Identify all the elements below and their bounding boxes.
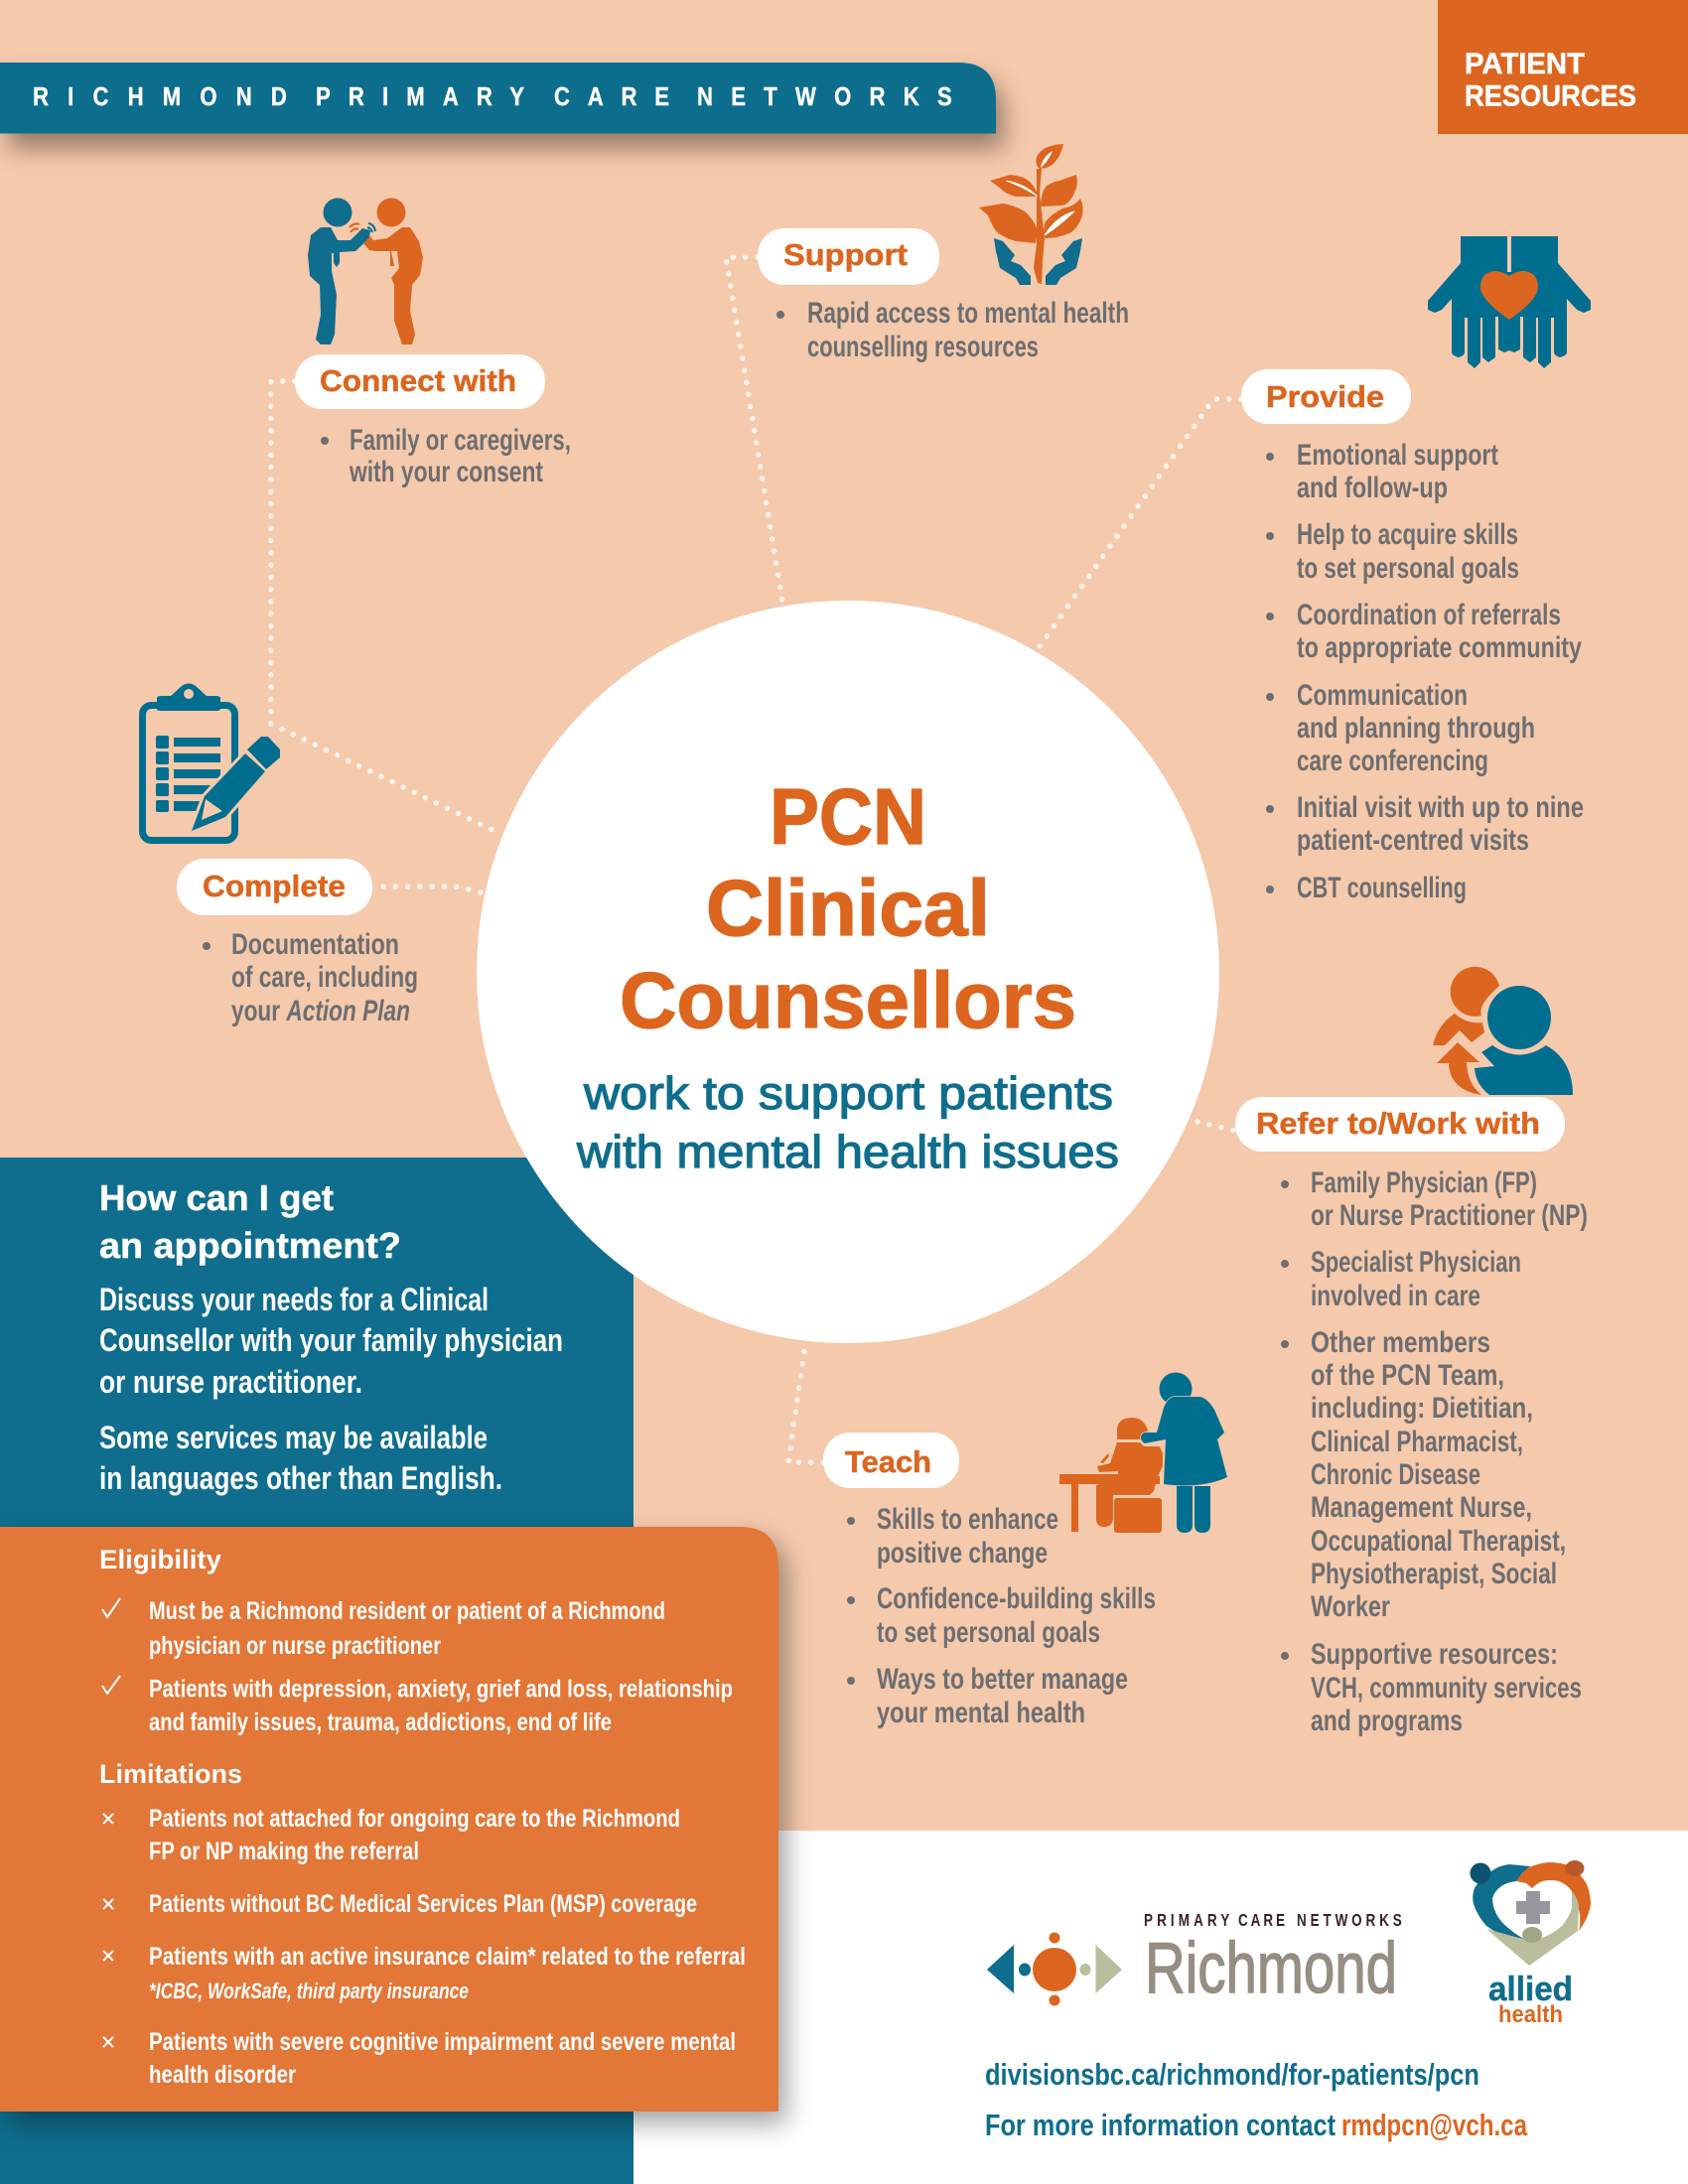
list: provide: care conferencing [1297, 745, 1488, 777]
appointment text: Discuss your needs for a Clinical [99, 1282, 489, 1317]
icon: plant in hands [979, 144, 1083, 285]
heading: eligibility: Eligibility [99, 1545, 221, 1574]
appointment text: or nurse practitioner. [99, 1364, 362, 1400]
panel: eligibility and limitations [0, 1527, 778, 2112]
appointment text: an appointment? [99, 1225, 401, 1266]
patient resources tag: RESOURCES [1465, 79, 1636, 113]
list: refer to / work with: Management Nurse, [1311, 1491, 1532, 1524]
patient resources tag: PATIENT [1465, 48, 1585, 80]
header banner: CARE [554, 82, 669, 111]
list: teach: your mental health [877, 1697, 1085, 1729]
patient resources tag [1438, 0, 1688, 134]
title [620, 772, 1076, 1044]
logo: primary care networks richmond: NETWORKS [1297, 1911, 1402, 1931]
list: refer to / work with: and programs [1311, 1705, 1463, 1737]
list: refer to / work with: including: Dietitian, [1311, 1392, 1533, 1425]
list: teach: Skills to enhance [877, 1503, 1058, 1536]
dotted connector: refer [1197, 1122, 1235, 1131]
icon: referral people [1433, 967, 1573, 1095]
list: refer to / work with: Clinical Pharmacist, [1311, 1426, 1523, 1458]
pill: connect with [295, 354, 545, 409]
list: provide: Emotional support [1297, 439, 1498, 472]
appointment text [99, 1177, 563, 1496]
logo: allied health [1470, 1860, 1591, 2028]
eligibility items: Patients with depression, anxiety, grief and loss, relationship [149, 1676, 733, 1704]
limitation items: Patients with an active insurance claim* related to the referral [149, 1943, 746, 1971]
list: provide: Help to acquire skills [1297, 518, 1518, 551]
title: Counsellors [620, 956, 1076, 1044]
dotted connector: connect with [271, 381, 494, 831]
list: refer to / work with: or Nurse Practitioner (NP) [1311, 1199, 1588, 1232]
icon: counsellor and student [1059, 1372, 1227, 1533]
pill: teach: Teach [845, 1444, 931, 1479]
list: refer to / work with [1281, 1166, 1588, 1737]
limitation items: FP or NP making the referral [149, 1838, 419, 1865]
logo: primary care networks richmond [987, 1911, 1402, 2008]
list: connect with [321, 424, 571, 488]
limitation items: health disorder [149, 2061, 296, 2089]
list: provide [1266, 439, 1584, 904]
pill: provide [1241, 369, 1411, 424]
pill: complete [177, 859, 372, 915]
list: support: Rapid access to mental health [807, 297, 1129, 330]
list: provide: to appropriate community [1297, 631, 1582, 664]
pill: complete: Complete [203, 869, 346, 903]
list: refer to / work with: Chronic Disease [1311, 1458, 1480, 1491]
list: provide: to set personal goals [1297, 552, 1519, 585]
list: connect with: Family or caregivers, [350, 424, 571, 457]
footer white area [633, 1831, 1688, 2184]
list: provide: Coordination of referrals [1297, 599, 1561, 631]
dotted connector: teach [788, 1344, 823, 1462]
icon: hands holding heart [1428, 236, 1591, 368]
logo: allied health: allied [1488, 1971, 1573, 2008]
list: refer to / work with: Occupational Therapist, [1311, 1525, 1566, 1558]
dotted connector: support [726, 257, 782, 602]
list: support [776, 297, 1129, 363]
list: refer to / work with: involved in care [1311, 1280, 1480, 1312]
contact line: For more information contact [985, 2108, 1336, 2142]
list: teach: Ways to better manage [877, 1663, 1128, 1696]
pill: support [758, 228, 939, 285]
list: provide: patient-centred visits [1297, 824, 1529, 857]
header banner: PRIMARY [316, 82, 524, 111]
list: provide: Communication [1297, 679, 1468, 712]
header banner [0, 63, 996, 133]
eligibility items: and family issues, trauma, addictions, end of life [149, 1708, 612, 1736]
list: refer to / work with: of the PCN Team, [1311, 1359, 1504, 1392]
heading: limitations: Limitations [99, 1759, 242, 1789]
teal appointment panel background [0, 1158, 633, 2184]
list: complete: your Action Plan [231, 995, 410, 1027]
appointment text: Some services may be available [99, 1420, 488, 1455]
title: Clinical [706, 864, 990, 952]
list: teach: to set personal goals [877, 1616, 1100, 1649]
list: refer to / work with: Supportive resources: [1311, 1638, 1558, 1671]
logo: primary care networks richmond: CARE [1238, 1911, 1285, 1931]
limitation items: *ICBC, WorkSafe, third party insurance [149, 1979, 469, 2003]
list: provide: and follow-up [1297, 472, 1448, 504]
header banner: NETWORKS [697, 82, 952, 111]
list: refer to / work with: Worker [1311, 1590, 1390, 1623]
list: teach [847, 1503, 1156, 1729]
pill: teach [823, 1433, 959, 1488]
icon: clipboard and pencil [143, 683, 280, 840]
list: refer to / work with: Family Physician (FP) [1311, 1166, 1537, 1199]
list: complete: Documentation [231, 928, 399, 961]
list: teach: Confidence-building skills [877, 1582, 1156, 1615]
dotted connector: complete [383, 887, 482, 892]
pill: refer to / work with [1235, 1097, 1565, 1152]
subtitle [576, 1067, 1119, 1177]
list: provide: Initial visit with up to nine [1297, 791, 1584, 824]
limitation items: Patients with severe cognitive impairment and severe mental [149, 2028, 736, 2056]
contact line: rmdpcn@vch.ca [1341, 2108, 1528, 2142]
title: PCN [770, 772, 926, 861]
list: teach: positive change [877, 1537, 1048, 1570]
limitation items: Patients without BC Medical Services Plan (MSP) coverage [149, 1890, 697, 1918]
website link: divisionsbc.ca/richmond/for-patients/pcn [985, 2057, 1479, 2092]
appointment text: Counsellor with your family physician [99, 1322, 563, 1358]
pill: connect with: Connect with [320, 363, 516, 398]
list: complete [203, 928, 418, 1027]
pill: support: Support [783, 237, 908, 272]
dotted connector: provide [1038, 399, 1241, 649]
limitation items: Patients not attached for ongoing care to the Richmond [149, 1805, 680, 1833]
subtitle: with mental health issues [576, 1126, 1119, 1177]
subtitle: work to support patients [583, 1067, 1113, 1119]
list: refer to / work with: Other members [1311, 1326, 1490, 1359]
list: support: counselling resources [807, 331, 1039, 363]
list: provide: CBT counselling [1297, 872, 1467, 904]
list: connect with: with your consent [349, 456, 543, 488]
pill: refer to / work with: Refer to/Work with [1256, 1106, 1540, 1141]
appointment text: How can I get [99, 1177, 334, 1218]
list: refer to / work with: Physiotherapist, Social [1311, 1558, 1557, 1590]
limitation items [103, 1805, 746, 2089]
list: refer to / work with: VCH, community services [1311, 1672, 1582, 1705]
logo: primary care networks richmond: PRIMARY [1144, 1911, 1230, 1931]
icon: two people connecting [308, 199, 423, 344]
list: refer to / work with: Specialist Physician [1311, 1246, 1521, 1279]
list: provide: and planning through [1297, 712, 1535, 745]
central circle [477, 601, 1219, 1343]
eligibility items: Must be a Richmond resident or patient of a Richmond [149, 1597, 665, 1625]
appointment text: in languages other than English. [99, 1460, 502, 1496]
logo: allied health: health [1498, 2001, 1563, 2028]
list: complete: of care, including [231, 961, 418, 994]
eligibility items [102, 1597, 733, 1736]
pill: provide: Provide [1266, 379, 1384, 414]
eligibility items: physician or nurse practitioner [149, 1632, 441, 1660]
header banner: RICHMOND [33, 82, 287, 111]
logo: primary care networks richmond: Richmond [1145, 1929, 1397, 2008]
